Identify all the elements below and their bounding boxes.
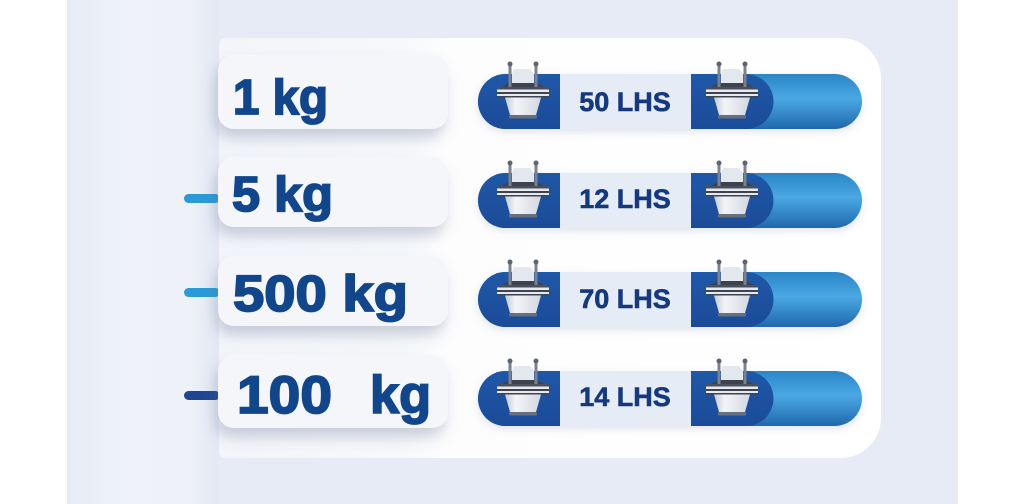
connector bbox=[184, 391, 220, 400]
main card bbox=[219, 38, 881, 458]
weight card: 5 kg bbox=[218, 157, 448, 227]
weight card: 100 kg bbox=[218, 355, 448, 428]
left background glow bbox=[67, 0, 219, 504]
weight card: 1 kg: 1 kg bbox=[233, 71, 328, 125]
capacity pill: 12 LHS: 12 LHS bbox=[579, 184, 671, 214]
connector bbox=[184, 194, 220, 203]
weight card: 5 kg: 5 kg bbox=[232, 168, 333, 222]
capacity pill: 70 LHS: 70 LHS bbox=[579, 284, 671, 314]
connector bbox=[184, 288, 220, 297]
capacity pill: 14 LHS bbox=[478, 358, 862, 426]
weight card: 1 kg bbox=[218, 55, 448, 129]
capacity pill: 70 LHS bbox=[478, 260, 862, 327]
row: 1 kg bbox=[218, 55, 862, 129]
row: 500 kg bbox=[184, 256, 862, 327]
weight card: 100 kg: kg bbox=[370, 366, 431, 425]
capacity pill: 50 LHS: 50 LHS bbox=[579, 87, 671, 117]
weight card: 500 kg: 500 kg bbox=[233, 265, 408, 322]
capacity pill: 12 LHS bbox=[478, 160, 862, 228]
row: 5 kg bbox=[184, 157, 862, 228]
weight card: 100 kg: 100 bbox=[237, 366, 332, 425]
capacity pill: 14 LHS: 14 LHS bbox=[579, 382, 671, 412]
weight card: 500 kg bbox=[218, 256, 448, 326]
row: 100 kg bbox=[184, 355, 862, 428]
capacity pill: 50 LHS bbox=[478, 62, 862, 129]
